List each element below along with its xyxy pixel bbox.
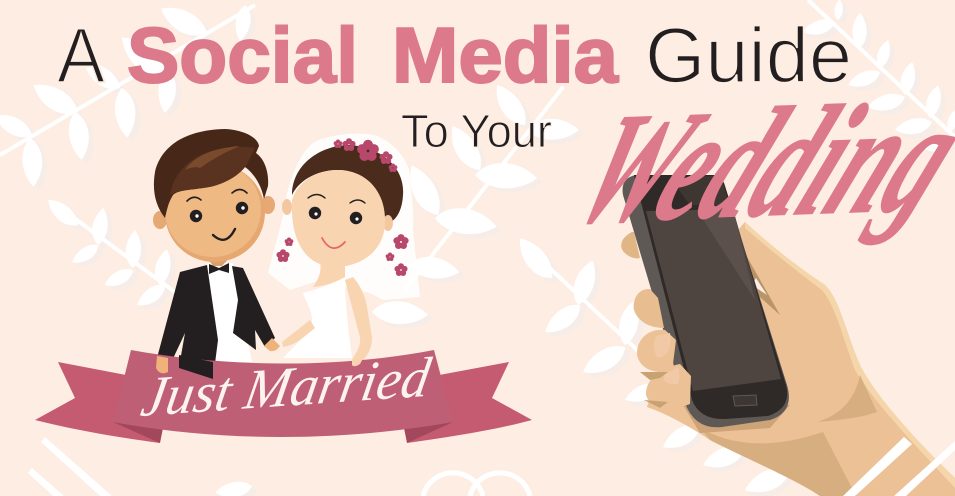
- groom: [153, 129, 280, 379]
- hand back: [647, 222, 955, 496]
- flower crown: [334, 138, 397, 172]
- groom hair: [154, 129, 268, 218]
- ribbon banner: [35, 350, 532, 443]
- groom jacket and shirt: [157, 263, 275, 379]
- bride brows and smile: [308, 194, 365, 248]
- bride neck: [313, 262, 345, 287]
- fingers: [621, 232, 691, 408]
- bride face: [292, 170, 385, 267]
- ribbon centre: [113, 350, 453, 437]
- dress: [283, 277, 352, 358]
- left ribbon tail: [35, 362, 160, 443]
- smartphone: [623, 175, 789, 427]
- groom neck: [205, 255, 232, 266]
- bride ears: [282, 199, 292, 215]
- subtitle: To Your: To Your: [401, 105, 552, 157]
- groom face: [156, 154, 274, 271]
- title: Guide: [645, 11, 852, 99]
- bride arms: [345, 277, 372, 365]
- title: [57, 11, 852, 99]
- groom eyes: [190, 202, 248, 222]
- groom hands: [156, 358, 171, 373]
- bow tie: [209, 263, 229, 274]
- groom sleeve over ribbon: [179, 355, 213, 379]
- title: A: [57, 11, 105, 99]
- bride eyes: [309, 207, 362, 224]
- veil flowers: [276, 234, 409, 276]
- ribbon folds: [113, 422, 163, 443]
- bride hair: [292, 145, 403, 223]
- ribbon text: Just Married: Just Married: [137, 346, 436, 429]
- veil: [268, 134, 420, 300]
- title: Social: [127, 11, 358, 99]
- title: Media: [392, 11, 619, 99]
- right ribbon tail: [407, 362, 532, 443]
- groom brows and smile: [187, 190, 247, 240]
- wrist bands: [843, 437, 955, 496]
- groom ears: [153, 211, 167, 229]
- bride: [268, 134, 420, 365]
